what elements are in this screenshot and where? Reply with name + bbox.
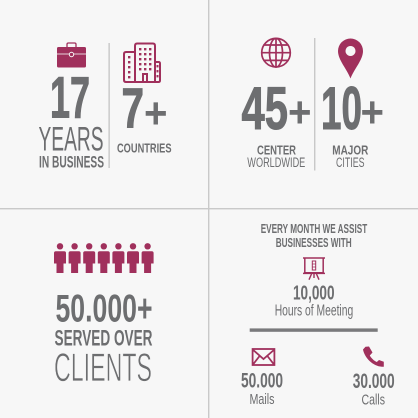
meeting hours label: Hours of Meeting — [275, 303, 353, 320]
icon: envelope — [253, 349, 274, 365]
center label: CENTER — [257, 142, 296, 157]
served over label: SERVED OVER — [54, 326, 152, 351]
calls label: Calls — [362, 392, 385, 409]
icon: row of people — [54, 243, 154, 273]
countries number: + — [144, 89, 168, 138]
icon: briefcase — [57, 43, 86, 68]
panel: centers and cities — [242, 38, 384, 170]
centers number: 45 — [242, 75, 288, 142]
in business label: IN BUSINESS — [39, 153, 104, 172]
intro text: BUSINESSES WITH — [276, 235, 352, 250]
panel: clients — [54, 243, 154, 390]
clients label: CLIENTS — [54, 346, 152, 390]
calls number: 30.000 — [353, 370, 395, 393]
clients number: 50.000+ — [56, 287, 152, 330]
intro text — [261, 221, 367, 250]
icon: presentation board — [303, 258, 325, 280]
mails number: 50.000 — [241, 370, 283, 393]
cities number: 10 — [321, 75, 362, 142]
icon: map pin — [338, 38, 363, 78]
icon: globe — [262, 38, 290, 67]
icon: telephone — [363, 346, 384, 367]
mails label: Mails — [250, 391, 274, 408]
cities label: CITIES — [336, 155, 364, 170]
major label: MAJOR — [332, 142, 369, 157]
panel: monthly assistance — [241, 221, 395, 409]
countries number: 7 — [122, 76, 144, 140]
icon: office buildings — [124, 44, 160, 82]
panel: years and countries — [38, 43, 172, 172]
countries number — [122, 76, 168, 140]
cities number: + — [360, 88, 384, 137]
countries label: COUNTRIES — [117, 141, 172, 156]
years number: 17 — [50, 66, 90, 130]
meeting hours number: 10,000 — [293, 283, 334, 305]
worldwide label: WORLDWIDE — [247, 155, 305, 170]
centers number: + — [288, 88, 312, 137]
years label: YEARS — [38, 120, 104, 158]
